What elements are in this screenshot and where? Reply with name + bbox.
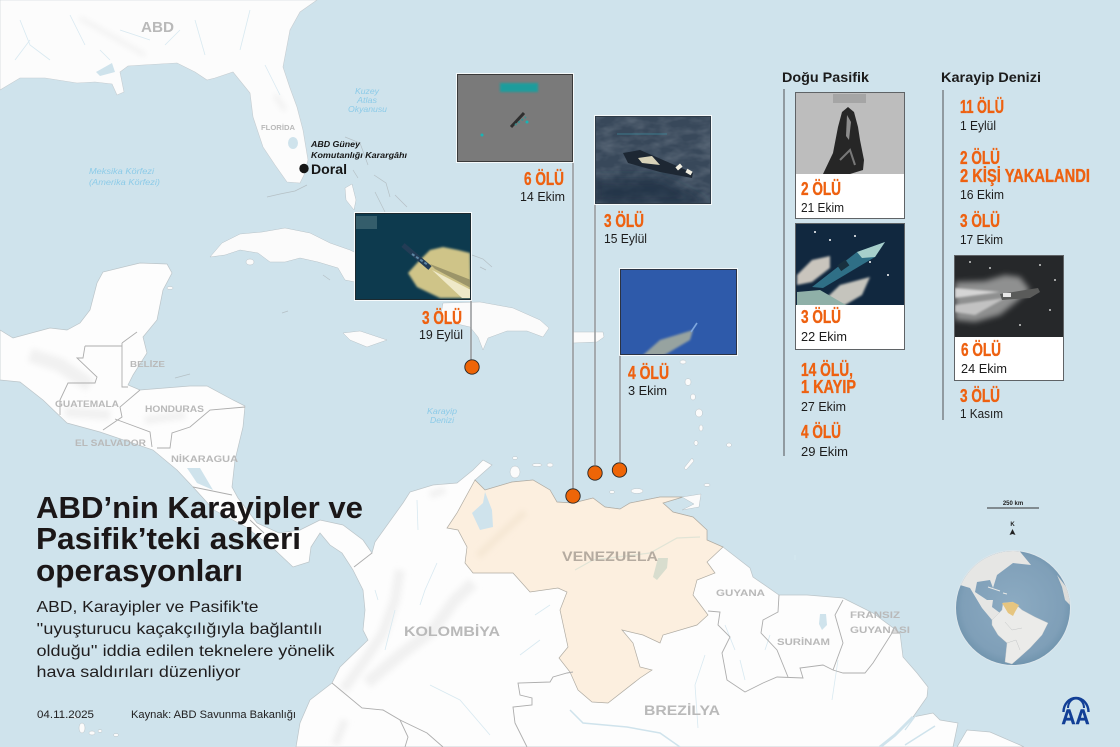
map labels: countries: KOLOMBİYA <box>404 624 500 639</box>
map labels: water bodies: Kuzey <box>355 86 380 96</box>
land: southeastern United States and Florida <box>0 0 317 183</box>
callout: Doral SOUTHCOM headquarters: Doral <box>311 161 347 177</box>
title: Pasifik’teki askeri <box>36 521 301 556</box>
logo: AA <box>1062 698 1090 729</box>
entry: 27 Ekim: 1 KAYIP <box>801 377 856 397</box>
date and source: 04.11.2025 <box>37 709 94 721</box>
photo: 3 Ekim strike <box>619 268 738 356</box>
entry: 29 Ekim: 29 Ekim <box>801 445 848 459</box>
map labels: water bodies: (Amerika Körfezi) <box>89 177 160 187</box>
map labels: countries: FLORİDA <box>261 124 295 132</box>
card: 24 Ekim: 6 ÖLÜ <box>961 340 1001 360</box>
map labels: countries: EL SALVADOR <box>75 438 147 448</box>
entry: 27 Ekim <box>801 360 856 414</box>
card: 22 Ekim: 22 Ekim <box>801 330 847 344</box>
leader lines from photos to strike points <box>471 162 620 490</box>
entry: 27 Ekim: 27 Ekim <box>801 400 846 414</box>
logo: AA: AA <box>1062 706 1090 729</box>
panel: Karayip Denizi strike list: Karayip Denizi <box>941 69 1041 85</box>
strike labels on map: 19 Eylül <box>419 328 463 342</box>
land texture: blurred relief <box>30 18 473 745</box>
panel: Doğu Pasifik strike list <box>782 69 904 459</box>
icon: north arrow: K <box>1010 522 1015 528</box>
entry: 16 Ekim <box>960 148 1090 202</box>
map labels: countries: GUYANASI <box>850 625 910 636</box>
subtitle <box>36 599 336 681</box>
Venezuela relief <box>478 512 525 556</box>
map labels: countries: GUYANA <box>716 588 765 599</box>
card: 22 Ekim: 3 ÖLÜ <box>801 307 841 327</box>
Bahamas, keys and small island arcs <box>175 137 492 378</box>
strike labels on map: 3 ÖLÜ <box>604 211 644 231</box>
inland lakes <box>96 63 827 630</box>
title: operasyonları <box>36 553 243 588</box>
entry: 17 Ekim <box>960 211 1003 247</box>
card: 24 Ekim <box>954 256 1064 380</box>
icon: north arrow <box>1010 522 1016 535</box>
land: Venezuela highlighted <box>447 480 723 703</box>
entry: 1 Kasım: 3 ÖLÜ <box>960 386 1000 406</box>
strike labels on map: 3 Ekim <box>628 384 667 398</box>
map labels: water bodies: Atlas <box>356 95 378 105</box>
map labels: water bodies: Okyanusu <box>348 104 387 114</box>
photo: 14 Ekim strike <box>456 73 574 163</box>
strike markers <box>465 360 627 503</box>
map labels: water bodies <box>89 86 457 425</box>
entry: 29 Ekim <box>801 422 848 459</box>
photo: 19 Eylül strike <box>354 212 472 301</box>
globe: Africa limb <box>1057 575 1070 605</box>
scale bar: 250 km <box>1003 501 1023 507</box>
globe: South America <box>992 602 1048 664</box>
locator globe <box>955 548 1072 666</box>
map labels: countries <box>55 19 910 718</box>
map labels: countries: FRANSIZ <box>850 610 900 621</box>
callout: Doral SOUTHCOM headquarters: Komutanlığı Karargâhı <box>311 150 408 160</box>
entry: 1 Kasım <box>960 386 1003 421</box>
entry: 17 Ekim: 3 ÖLÜ <box>960 211 1000 231</box>
land: Central and South America <box>0 263 958 747</box>
card: 21 Ekim: 21 Ekim <box>801 201 844 215</box>
strike labels on map <box>419 169 669 398</box>
map labels: countries: NİKARAGUA <box>171 454 239 464</box>
subtitle: hava saldırıları düzenliyor <box>36 664 241 681</box>
card: 22 Ekim <box>796 224 904 350</box>
strike labels on map: 6 ÖLÜ <box>524 169 564 189</box>
callout: Doral SOUTHCOM headquarters <box>299 139 408 177</box>
map labels: countries: SURİNAM <box>777 637 830 648</box>
title: ABD’nin Karayipler ve <box>36 490 363 525</box>
map labels: water bodies: Denizi <box>430 415 455 425</box>
subtitle: ABD, Karayipler ve Pasifik'te <box>36 599 259 616</box>
entry: 16 Ekim: 2 KİŞİ YAKALANDI <box>960 166 1090 186</box>
card: 24 Ekim: 24 Ekim <box>961 362 1007 376</box>
globe: Venezuela highlight <box>1002 602 1019 616</box>
rivers <box>15 10 838 735</box>
entry: 27 Ekim: 14 ÖLÜ, <box>801 360 853 380</box>
land: northern Brazil corner <box>957 730 1024 747</box>
map labels: water bodies: Meksika Körfezi <box>89 166 155 176</box>
callout: Doral SOUTHCOM headquarters: ABD Güney <box>310 139 361 149</box>
entry: 1 Eylül: 11 ÖLÜ <box>960 97 1004 117</box>
title <box>36 490 363 588</box>
subtitle: ''uyuşturucu kaçakçılığıyla bağlantılı <box>36 621 322 638</box>
panel: Karayip Denizi strike list <box>941 69 1090 421</box>
strike labels on map: 4 ÖLÜ <box>628 363 669 383</box>
map labels: countries: ABD <box>141 19 174 36</box>
entry: 1 Eylül <box>960 97 1004 133</box>
card: 21 Ekim: 2 ÖLÜ <box>801 179 841 199</box>
map labels: countries: GUATEMALA <box>55 399 120 409</box>
entry: 16 Ekim: 2 ÖLÜ <box>960 148 1000 168</box>
card: 21 Ekim <box>796 92 904 218</box>
map labels: countries: BREZİLYA <box>644 703 720 718</box>
scale bar <box>987 501 1039 508</box>
land: Caribbean islands <box>73 184 732 736</box>
map labels: countries: VENEZUELA <box>562 549 658 564</box>
entry: 29 Ekim: 4 ÖLÜ <box>801 422 841 442</box>
photo: 15 Eylül strike <box>594 115 712 205</box>
entry: 1 Kasım: 1 Kasım <box>960 407 1003 421</box>
subtitle: olduğu'' iddia edilen teknelere yönelik <box>36 643 336 660</box>
date and source: Kaynak: ABD Savunma Bakanlığı <box>131 709 296 721</box>
map labels: countries: HONDURAS <box>145 404 204 414</box>
entry: 17 Ekim: 17 Ekim <box>960 233 1003 247</box>
entry: 1 Eylül: 1 Eylül <box>960 119 996 133</box>
Orinoco and Guri reservoir <box>575 537 700 570</box>
entry: 16 Ekim: 16 Ekim <box>960 188 1004 202</box>
strike labels on map: 14 Ekim <box>520 190 565 204</box>
strike labels on map: 15 Eylül <box>604 232 647 246</box>
Amazon river <box>570 707 935 747</box>
date and source <box>37 709 296 721</box>
country borders <box>60 332 900 747</box>
map labels: water bodies: Karayip <box>427 406 457 416</box>
strike labels on map: 3 ÖLÜ <box>422 308 462 328</box>
panel: Doğu Pasifik strike list: Doğu Pasifik <box>782 69 869 85</box>
globe: North and Central America <box>960 551 1031 620</box>
map labels: countries: BELİZE <box>130 359 165 369</box>
